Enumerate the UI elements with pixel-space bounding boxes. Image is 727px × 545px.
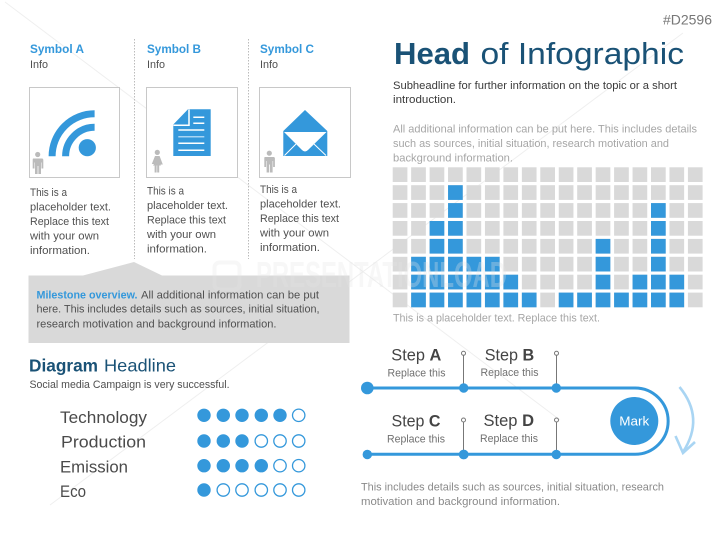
mark circle: Mark [619, 414, 650, 428]
body text B: with your own [146, 229, 216, 241]
body text A: information. [30, 245, 90, 257]
icon: woman figure [152, 150, 163, 172]
body text A: with your own [29, 230, 99, 242]
diagram heading: Diagram [29, 356, 98, 376]
body text C: information. [260, 242, 320, 254]
icon frame C [260, 88, 350, 178]
id tag: #D2596 [663, 12, 712, 28]
heading: symbol A: Symbol A [30, 42, 84, 56]
info label A: Info [30, 59, 48, 71]
info label B: Info [147, 59, 165, 71]
step A: Replace this [388, 368, 446, 380]
timeline nodes [361, 382, 561, 459]
subheadline: Subheadline for further information on the topic or a short [393, 80, 677, 92]
step D: Replace this [480, 433, 539, 445]
heading: symbol B: Symbol B [147, 42, 201, 56]
callout text [36, 290, 320, 330]
rating: production [61, 433, 305, 452]
icon: rss signal [52, 114, 96, 156]
rating: emission [60, 458, 305, 477]
title: Head [394, 36, 470, 71]
info label C: Info [260, 59, 278, 71]
step C [387, 411, 446, 445]
icon: open envelope [283, 110, 327, 156]
body text B: This is a [147, 186, 184, 198]
body text C [259, 184, 341, 254]
step A: Step A [391, 346, 441, 365]
callout text: All additional information can be put [141, 290, 319, 302]
waffle chart [393, 167, 703, 307]
callout: milestone overview [28, 262, 350, 343]
pin markers [462, 351, 558, 454]
body text B: Replace this text [147, 215, 226, 227]
icon: man figure A [33, 152, 43, 174]
step B: Step B [485, 346, 534, 364]
watermark [214, 254, 507, 295]
step C: Replace this [387, 433, 446, 445]
rating: technology: Technology [60, 408, 147, 427]
body text A: Replace this text [30, 216, 109, 228]
body text B: placeholder text. [147, 200, 228, 212]
icon frame A [30, 88, 120, 178]
step D [480, 411, 539, 445]
arrow: direction [676, 387, 695, 453]
subheadline [393, 80, 677, 106]
icon: man figure C [264, 151, 275, 172]
additional information text: such as sources, initial situation, research motivation and [393, 138, 669, 150]
panel: symbol C [259, 42, 350, 254]
body text C: placeholder text. [260, 198, 341, 210]
diagram subtitle: Social media Campaign is very successful. [30, 379, 230, 391]
step B: Replace this [480, 367, 539, 379]
panel: symbol B [146, 42, 238, 256]
body text A [29, 187, 111, 257]
rating: production: Production [61, 433, 146, 452]
diagram heading remainder: Headline [104, 356, 176, 376]
callout text: here. This includes details such as sources, initial situation, [36, 304, 320, 316]
heading: symbol C: Symbol C [260, 42, 314, 56]
timeline track [368, 388, 668, 454]
rating: eco [60, 482, 305, 501]
watermark: PRESENTATIONLOAD [256, 254, 507, 295]
callout text: research motivation and background information. [36, 318, 276, 330]
timeline description: motivation and background information. [361, 496, 560, 508]
rating: technology [60, 408, 305, 427]
timeline [361, 346, 695, 459]
timeline description: This includes details such as sources, initial situation, research [361, 482, 664, 494]
step B [480, 346, 539, 379]
step D: Step D [484, 411, 534, 430]
additional information text: All additional information can be put here. This includes details [393, 124, 698, 136]
body text C: This is a [260, 184, 297, 196]
mark circle [610, 397, 658, 445]
additional information text: background information. [393, 152, 513, 164]
body text A: This is a [30, 187, 67, 199]
rating: emission: Emission [60, 458, 128, 477]
body text B [146, 186, 228, 256]
callout text: Milestone overview. [36, 290, 138, 302]
additional information text [393, 124, 698, 164]
subheadline: introduction. [393, 94, 456, 106]
timeline description [361, 482, 664, 508]
icon frame B [146, 88, 238, 178]
panel: symbol A [29, 42, 120, 257]
body text B: information. [147, 244, 207, 256]
body text C: Replace this text [260, 213, 339, 225]
rating: eco: Eco [60, 482, 86, 501]
waffle chart caption: This is a placeholder text. Replace this text. [393, 313, 600, 325]
icon: document [173, 109, 211, 156]
step A [388, 346, 446, 380]
body text A: placeholder text. [30, 202, 111, 214]
body text C: with your own [259, 228, 329, 240]
step C: Step C [392, 411, 440, 430]
title remainder: of Infographic [480, 36, 684, 71]
